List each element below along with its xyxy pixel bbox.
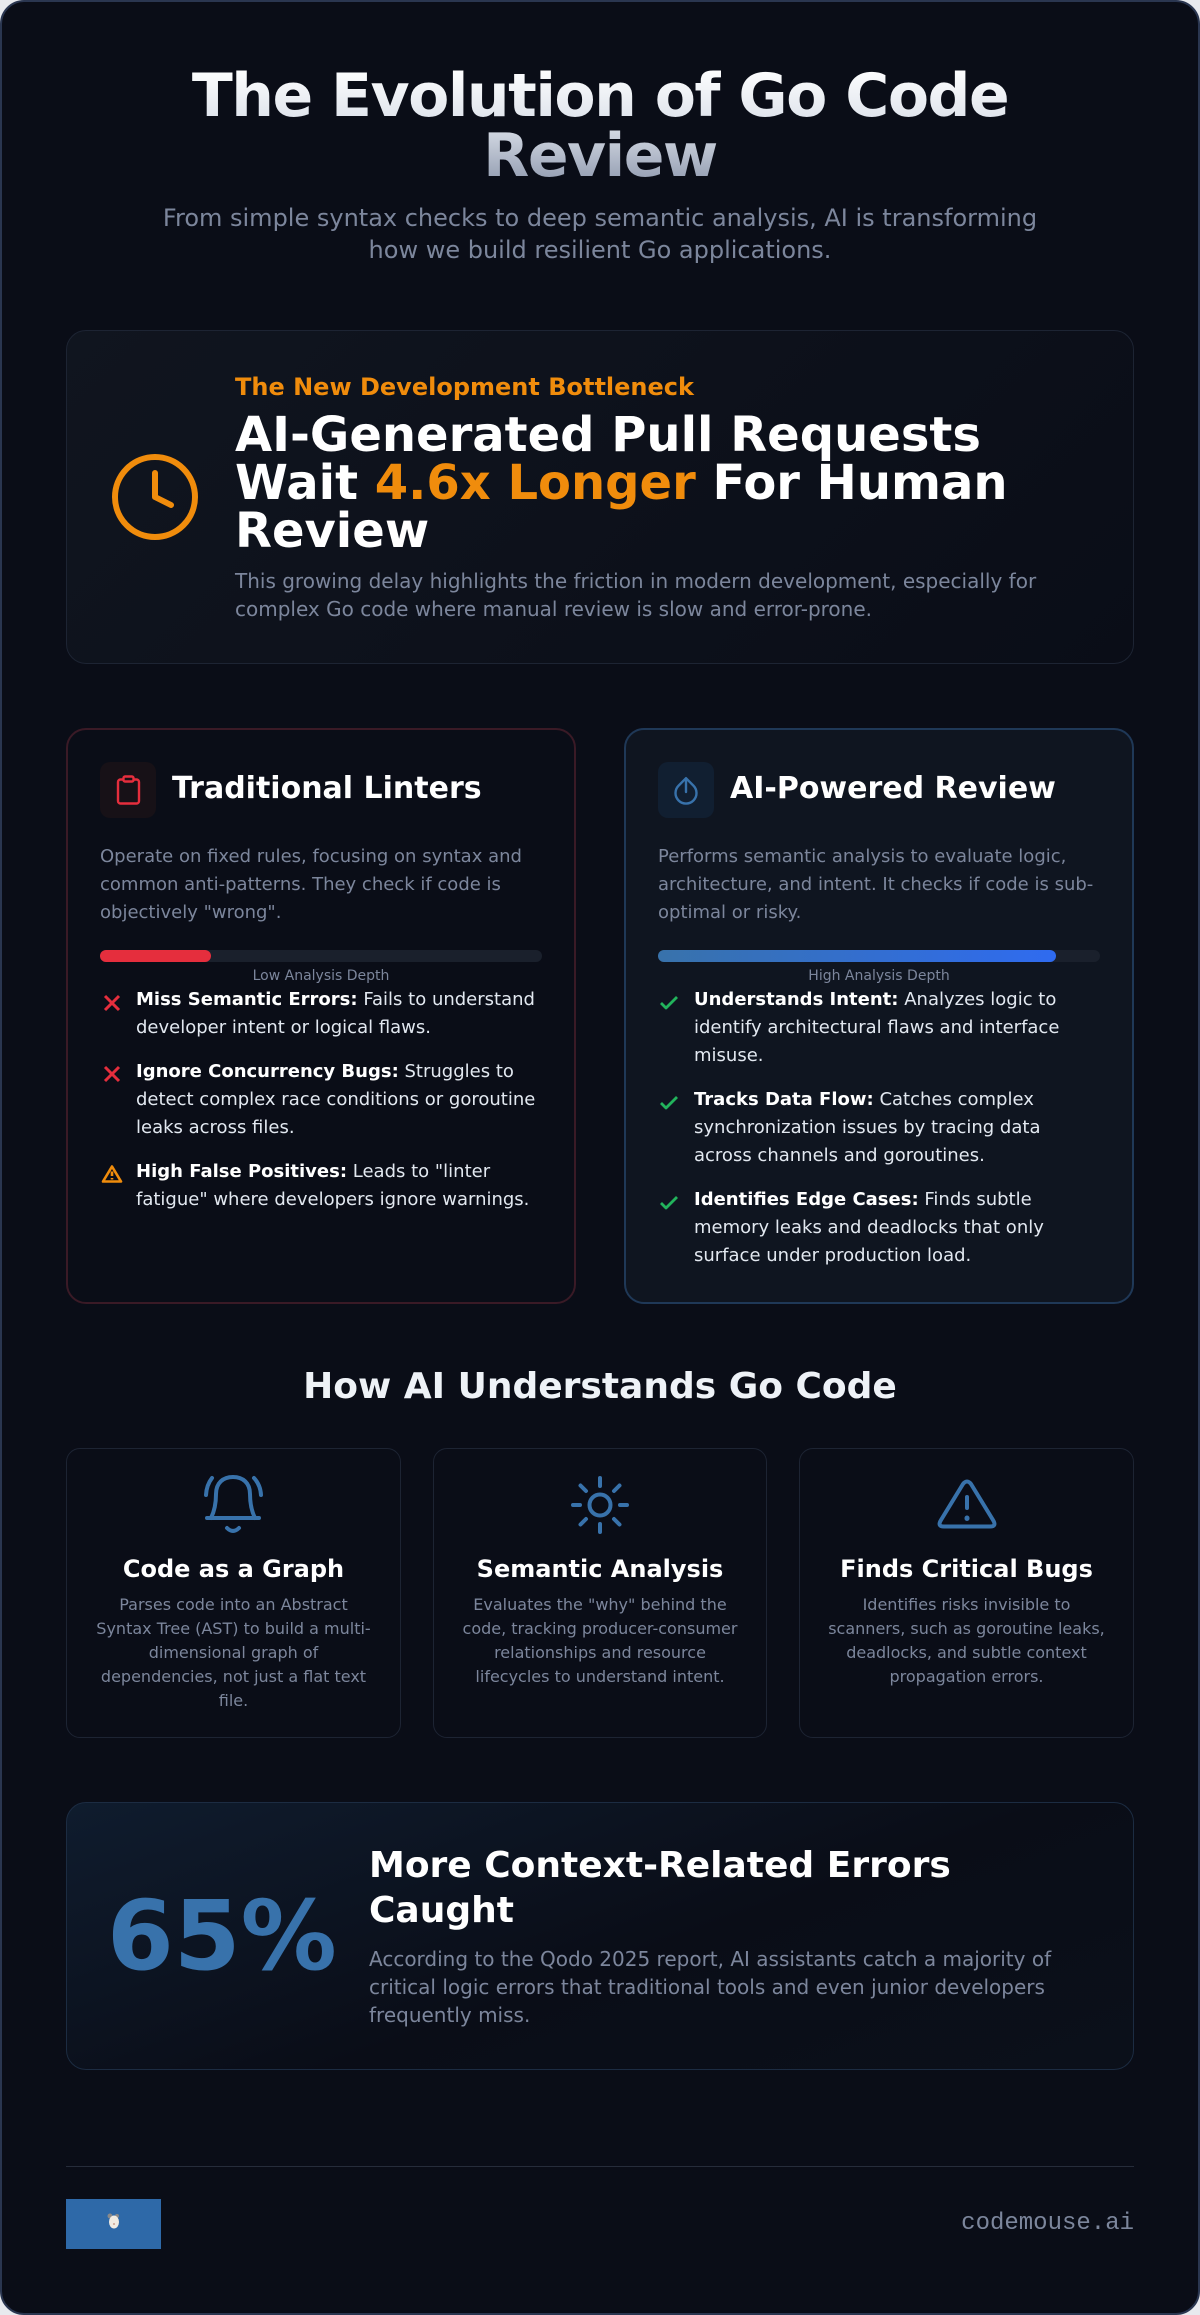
subtitle [163, 204, 1037, 264]
icon: warning [102, 1165, 122, 1183]
footer brand: codemouse.ai [961, 2210, 1134, 2237]
icon: clock [112, 454, 198, 540]
list item: tracks data flow: Tracks Data Flow: Catches complex [694, 1089, 1034, 1110]
panel: AI-powered review [624, 728, 1134, 1304]
card title: Code as a Graph [123, 1555, 344, 1583]
heading: Traditional Linters [172, 771, 482, 806]
title: Review [483, 121, 717, 191]
section heading: How AI Understands Go Code [303, 1366, 897, 1407]
list item: tracks data flow: across channels and goroutines. [694, 1145, 985, 1166]
card text: propagation errors. [890, 1667, 1043, 1686]
list item: edge cases: memory leaks and deadlocks that only [694, 1217, 1044, 1238]
list item: tracks data flow [694, 1089, 1040, 1166]
list item: understands intent: identify architectural flaws and interface [694, 1017, 1059, 1038]
icon: cross [104, 995, 120, 1011]
stat heading: More Context-Related Errors [369, 1845, 951, 1886]
list item: concurrency bugs: leaks across files. [136, 1117, 295, 1138]
card text: Evaluates the "why" behind the [473, 1595, 727, 1614]
headline: AI-Generated Pull Requests [235, 407, 981, 463]
list item: edge cases: Identifies Edge Cases: Finds subtle [694, 1189, 1032, 1210]
card text: Identifies risks invisible to [863, 1595, 1070, 1614]
bar: high analysis depth [658, 950, 1100, 962]
stat description: critical logic errors that traditional tools and even junior developers [369, 1975, 1045, 1999]
bar fill 25% [100, 950, 210, 962]
icon: clipboard [100, 762, 156, 818]
description [100, 846, 522, 923]
description: optimal or risky. [658, 902, 801, 923]
card text: Parses code into an Abstract [119, 1595, 348, 1614]
footer divider [66, 2166, 1134, 2167]
stat number: 65% [107, 1880, 337, 1992]
card text [463, 1595, 738, 1686]
title [2, 66, 1198, 186]
list item: concurrency bugs: detect complex race conditions or goroutine [136, 1089, 535, 1110]
card text: lifecycles to understand intent. [475, 1667, 725, 1686]
list item: understands intent: Understands Intent: Analyzes logic to [694, 989, 1056, 1010]
description: objectively "wrong". [100, 902, 281, 923]
subtitle: From simple syntax checks to deep semantic analysis, AI is transforming [163, 204, 1037, 232]
bar fill 90% [658, 950, 1056, 962]
icon: check [660, 1196, 678, 1210]
headline: Review [235, 503, 429, 559]
list item: false positives [136, 1161, 529, 1210]
icon: bell [204, 1475, 263, 1533]
list item: false positives: fatigue" where developers ignore warnings. [136, 1189, 529, 1210]
description [234, 569, 1036, 621]
list item: concurrency bugs [136, 1061, 535, 1138]
description: complex Go code where manual review is slow and error-prone. [235, 597, 872, 621]
panel: bottleneck [66, 330, 1134, 664]
card text: Syntax Tree (AST) to build a multi- [96, 1619, 371, 1638]
stat description: According to the Qodo 2025 report, AI assistants catch a majority of [369, 1947, 1051, 1971]
label: new development bottleneck: The New Development Bottleneck [235, 373, 694, 401]
card text [828, 1595, 1105, 1686]
list item: false positives: High False Positives: Leads to "linter [136, 1161, 490, 1182]
stat description [369, 1947, 1052, 2027]
headline: Wait 4.6x Longer For Human [235, 455, 1008, 511]
subtitle: how we build resilient Go applications. [369, 236, 831, 264]
icon: sun [571, 1476, 629, 1534]
bar: low analysis depth [100, 950, 542, 962]
list item: understands intent: misuse. [694, 1045, 764, 1066]
list item: semantic errors [136, 989, 535, 1038]
panel: traditional linters [66, 728, 576, 1304]
card text: relationships and resource [494, 1643, 706, 1662]
card: semantic analysis [433, 1448, 767, 1738]
list item: semantic errors: Miss Semantic Errors: Fails to understand [136, 989, 535, 1010]
heading: AI-Powered Review [730, 771, 1056, 806]
card text: code, tracking producer-consumer [463, 1619, 737, 1638]
stat heading: Caught [369, 1890, 514, 1931]
description: common anti-patterns. They check if code is [100, 874, 501, 895]
footer logo [66, 2199, 161, 2249]
card text [96, 1595, 371, 1710]
headline [235, 407, 1008, 559]
card text: file. [219, 1691, 248, 1710]
card: finds critical bugs [799, 1448, 1134, 1738]
bar caption: Low Analysis Depth [253, 968, 389, 984]
icon: warning triangle [938, 1480, 996, 1528]
card text: scanners, such as goroutine leaks, [828, 1619, 1105, 1638]
description: This growing delay highlights the friction in modern development, especially for [235, 569, 1036, 593]
icon: cross [104, 1066, 120, 1082]
stat description: frequently miss. [369, 2003, 530, 2027]
description [658, 846, 1093, 923]
card: code as a graph [66, 1448, 401, 1738]
icon: power [658, 762, 714, 818]
list item: understands intent [694, 989, 1059, 1066]
card title: Semantic Analysis [477, 1555, 723, 1583]
icon: check [660, 996, 678, 1010]
card text: dimensional graph of [149, 1643, 318, 1662]
icon: mouse [108, 2214, 119, 2228]
list item: edge cases: surface under production load. [694, 1245, 971, 1266]
list item: concurrency bugs: Ignore Concurrency Bugs: Struggles to [136, 1061, 514, 1082]
icon: check [660, 1096, 678, 1110]
stat heading [369, 1845, 951, 1931]
description: Performs semantic analysis to evaluate logic, [658, 846, 1066, 867]
title: The Evolution of Go Code [192, 61, 1008, 131]
bar caption: High Analysis Depth [808, 968, 950, 984]
list item: semantic errors: developer intent or logical flaws. [136, 1017, 431, 1038]
list item: edge cases [694, 1189, 1044, 1266]
card text: deadlocks, and subtle context [846, 1643, 1087, 1662]
panel: 65% stat [66, 1802, 1134, 2070]
description: architecture, and intent. It checks if code is sub- [658, 874, 1093, 895]
card text: dependencies, not just a flat text [101, 1667, 366, 1686]
list item: tracks data flow: synchronization issues by tracing data [694, 1117, 1040, 1138]
card title: Finds Critical Bugs [840, 1555, 1093, 1583]
description: Operate on fixed rules, focusing on syntax and [100, 846, 522, 867]
